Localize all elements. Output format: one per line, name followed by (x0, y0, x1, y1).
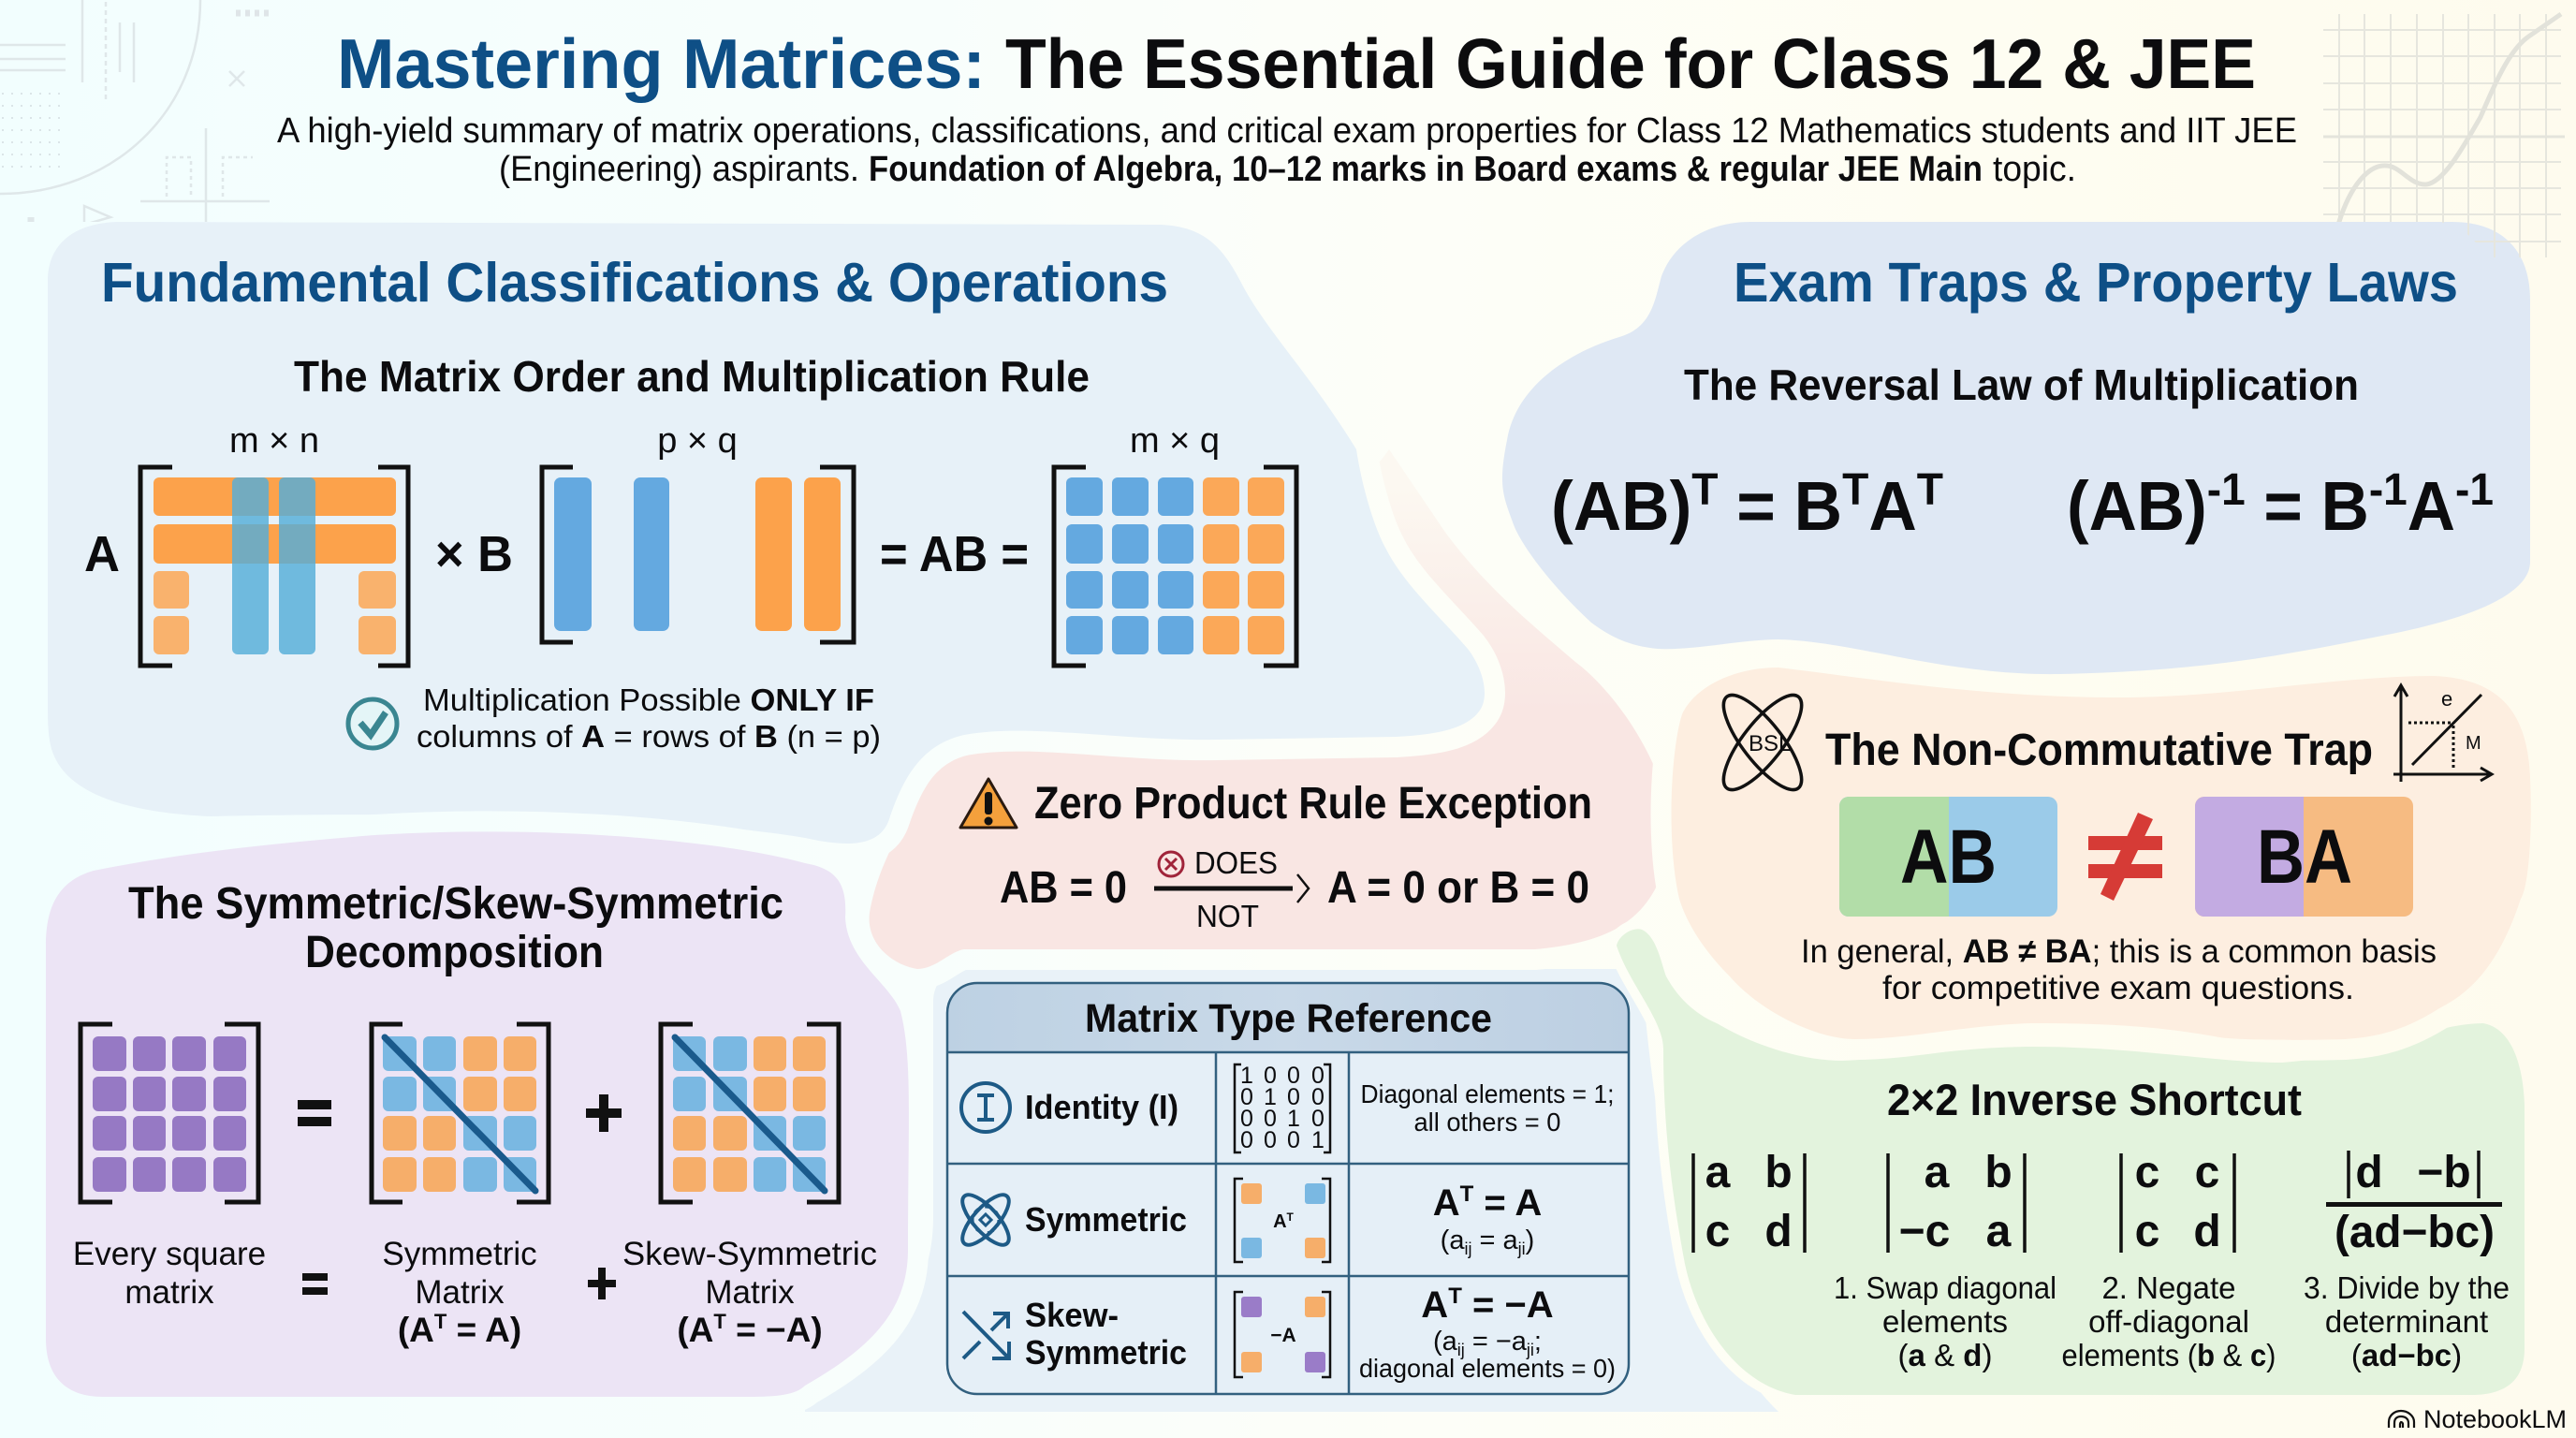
identity matrix: 0 (1311, 1084, 1325, 1110)
identity matrix: 0 (1311, 1063, 1325, 1089)
note: multiplication condition (417, 683, 881, 755)
formula: inverse reversal: -1 (2455, 465, 2494, 515)
title: Mastering Matrices: (337, 24, 986, 103)
panel: non-commutative backing (1672, 668, 2531, 1040)
heading: decomposition: Decomposition (305, 928, 604, 977)
identity matrix: 0 (1287, 1084, 1300, 1110)
subtitle: Foundation of Algebra, 10–12 marks in Board exams & regular JEE Main (869, 150, 1983, 189)
identity matrix (1235, 1063, 1330, 1153)
matrix A (140, 467, 408, 666)
icon: atom (1711, 684, 1814, 800)
order labels: m × n (229, 421, 319, 461)
row: symmetric: = a (1471, 1225, 1519, 1255)
icon: graph: M (2466, 733, 2481, 754)
arrow (1154, 874, 1309, 902)
heading: reversal law: The Reversal Law of Multiplication (1684, 360, 2359, 409)
icon: warning (960, 779, 1017, 828)
identity matrix: 0 (1287, 1127, 1300, 1153)
caption: step 2: 2. Negate (2101, 1270, 2236, 1305)
panel: 2x2 inverse backing (1617, 929, 2525, 1395)
caption: step 1: (a & d) (1898, 1338, 1992, 1372)
operator: plus (586, 1094, 622, 1132)
row: skew-symmetric: ij (1457, 1341, 1465, 1359)
heading: non-commutative trap: The Non-Commutative Trap (1825, 726, 2373, 775)
determinant: negate: c (2195, 1148, 2219, 1197)
matrix: skew-symmetric (661, 1024, 839, 1202)
panel: decomposition (46, 831, 909, 1397)
formula: inverse reversal: = B (2246, 467, 2369, 545)
equation: zero product (1000, 845, 1589, 933)
determinant: swap: −c (1899, 1207, 1950, 1256)
label: symmetric matrix (382, 1236, 537, 1349)
panel: exam traps backing (1502, 222, 2530, 674)
formula: transpose reversal: T (1691, 465, 1719, 515)
determinant: negate: c (2135, 1207, 2159, 1256)
equation: zero product: DOES (1194, 845, 1278, 880)
row: skew-symmetric: Symmetric (1025, 1333, 1187, 1372)
caption: step 3: determinant (2325, 1304, 2488, 1339)
caption: step 2 (2061, 1270, 2276, 1372)
symbol: not equal (2088, 813, 2162, 901)
identity matrix: 1 (1311, 1127, 1325, 1153)
caption: step 2: off-diagonal (2088, 1304, 2249, 1339)
row: skew-symmetric: Skew- (1025, 1296, 1119, 1334)
title: The Essential Guide for Class 12 & JEE (1005, 24, 2256, 103)
fraction: divide: d (2355, 1148, 2383, 1197)
identity matrix: 0 (1264, 1106, 1277, 1132)
fraction: divide: (ad−bc) (2334, 1208, 2495, 1257)
determinant: negate: d (2193, 1207, 2221, 1256)
label: skew-symmetric matrix: Skew-Symmetric (622, 1236, 877, 1272)
identity matrix: 0 (1240, 1127, 1253, 1153)
heading: zero product rule exception: Zero Product Rule Exception (1034, 779, 1592, 829)
row: skew-symmetric: ; (1534, 1327, 1542, 1357)
heading: decomposition: The Symmetric/Skew-Symmetric (128, 879, 783, 929)
subtitle: (Engineering) aspirants. (499, 150, 859, 189)
panel backing: matrix type reference (805, 969, 1778, 1412)
row: identity (961, 1063, 1614, 1153)
operator: equals (298, 1100, 331, 1126)
formula: transpose reversal: (AB) (1551, 467, 1697, 545)
row: skew-symmetric: = −A (1462, 1284, 1554, 1326)
formula: inverse reversal: A (2408, 467, 2455, 545)
heading: decomposition (128, 879, 783, 977)
icon: graph: e (2441, 687, 2452, 711)
row: symmetric: ij (1464, 1240, 1471, 1258)
identity matrix: 1 (1240, 1063, 1253, 1089)
label: skew-symmetric matrix: = −A) (726, 1311, 823, 1349)
determinant: swap: a (1986, 1207, 2012, 1256)
symmetric mini matrix (1235, 1179, 1330, 1262)
identity matrix: 0 (1264, 1063, 1277, 1089)
row: symmetric: A (1433, 1182, 1460, 1224)
identity matrix: 0 (1240, 1084, 1253, 1110)
box: BA (2195, 797, 2413, 917)
subtitle: topic. (1993, 150, 2076, 189)
row: symmetric: T (1460, 1181, 1474, 1207)
icon: graph (2393, 685, 2492, 782)
operators: = AB = (880, 526, 1029, 582)
caption: step 2: elements (b & c) (2061, 1338, 2276, 1372)
matrix: every square (80, 1024, 258, 1202)
row: symmetric: = A (1473, 1182, 1542, 1224)
operators: A (84, 526, 120, 582)
label: every square matrix: matrix (124, 1274, 214, 1311)
operators (84, 526, 1029, 582)
label: symmetric matrix: Symmetric (382, 1236, 537, 1272)
determinant: original: a (1705, 1148, 1731, 1197)
subtitle: A high-yield summary of matrix operations, classifications, and critical exam properties for Class 12 Mathematics students and IIT JEE (277, 111, 2297, 151)
operator: plus label (588, 1268, 616, 1299)
row: symmetric: ) (1526, 1225, 1534, 1255)
panel: zero product rule (870, 449, 1669, 969)
heading: exam traps: Exam Traps & Property Laws (1734, 252, 2458, 314)
caption: step 1 (1834, 1270, 2056, 1372)
equation: zero product: A = 0 or B = 0 (1327, 863, 1589, 913)
row: skew-symmetric: = −a (1465, 1327, 1528, 1357)
formula: transpose reversal: A (1868, 467, 1917, 545)
diagram: matrix multiplication (84, 421, 1296, 666)
box: AB: AB (1900, 814, 1997, 900)
label: skew-symmetric matrix: Matrix (705, 1274, 795, 1311)
subtitle (277, 111, 2297, 189)
formula: inverse reversal: -1 (2369, 465, 2408, 515)
operator: equals label (302, 1273, 328, 1295)
label: symmetric matrix: Matrix (415, 1274, 505, 1311)
label: symmetric matrix: (A (398, 1311, 434, 1349)
row: skew-symmetric: (a (1433, 1327, 1457, 1357)
row: skew-symmetric: T (1448, 1284, 1462, 1309)
title (337, 24, 2256, 103)
note: non-commutative: for competitive exam questions. (1882, 969, 2354, 1006)
determinant: negate: c (2135, 1148, 2159, 1197)
row: identity: all others = 0 (1413, 1108, 1561, 1137)
determinant: negate (2121, 1148, 2234, 1256)
row: skew-symmetric: diagonal elements = 0) (1359, 1354, 1616, 1383)
formula: transpose reversal: T (1842, 465, 1868, 515)
matrix B (542, 467, 854, 642)
label: symmetric matrix: = A) (446, 1311, 521, 1349)
matrix: symmetric (372, 1024, 549, 1202)
heading: fundamental classifications: Fundamental Classifications & Operations (101, 252, 1168, 314)
icon: atom: BSL (1749, 731, 1791, 756)
symmetric mini matrix: A (1273, 1211, 1287, 1232)
determinant: swap: a (1925, 1148, 1950, 1197)
icon: check (348, 699, 397, 748)
note: multiplication condition: Multiplication Possible ONLY IF (423, 683, 874, 718)
note: multiplication condition: columns of A = rows of B (n = p) (417, 720, 881, 755)
row: symmetric: ji (1517, 1240, 1526, 1258)
caption: step 1: elements (1882, 1304, 2008, 1339)
heading: 2x2 inverse: 2×2 Inverse Shortcut (1887, 1075, 2302, 1124)
identity matrix: 1 (1264, 1084, 1277, 1110)
caption: step 3: (ad−bc) (2351, 1338, 2462, 1372)
panel: fundamental classifications (48, 222, 1485, 844)
icon: symmetric atom (956, 1188, 1016, 1252)
order labels: p × q (657, 421, 738, 461)
identity matrix: 0 (1240, 1106, 1253, 1132)
determinant: swap: b (1984, 1148, 2012, 1197)
matrix AB (1054, 467, 1296, 666)
row: symmetric: (a (1441, 1225, 1464, 1255)
row: skew-symmetric: A (1421, 1284, 1448, 1326)
skew mini matrix: −A (1270, 1325, 1296, 1346)
icon: cross (1159, 852, 1183, 876)
formula: transpose reversal: = B (1719, 467, 1842, 545)
logo: NotebookLM: NotebookLM (2423, 1405, 2567, 1433)
fraction: divide: −b (2417, 1148, 2471, 1197)
identity matrix: 0 (1287, 1063, 1300, 1089)
formula: transpose reversal: T (1917, 465, 1943, 515)
row: identity: Diagonal elements = 1; (1361, 1079, 1614, 1108)
identity matrix: 0 (1264, 1127, 1277, 1153)
note: non-commutative (1801, 932, 2437, 1006)
determinant: original (1693, 1148, 1805, 1256)
determinant: original: b (1764, 1148, 1793, 1197)
heading: matrix order rule: The Matrix Order and Multiplication Rule (294, 352, 1090, 401)
fraction: divide (2326, 1148, 2502, 1257)
order labels (229, 421, 1220, 461)
row: skew-symmetric: ji (1526, 1341, 1534, 1359)
table heading: Matrix Type Reference (1085, 996, 1492, 1041)
operators: × B (435, 526, 513, 582)
determinant: original: c (1705, 1207, 1730, 1256)
note: non-commutative: In general, AB ≠ BA; this is a common basis (1801, 932, 2437, 970)
box: BA: BA (2257, 814, 2352, 900)
row: symmetric: Symmetric (1025, 1200, 1187, 1239)
identity matrix: 0 (1311, 1106, 1325, 1132)
label: skew-symmetric matrix: T (713, 1310, 726, 1333)
determinant: swap (1888, 1148, 2025, 1256)
row: symmetric (956, 1179, 1542, 1262)
label: skew-symmetric matrix (622, 1236, 877, 1349)
equation: zero product: NOT (1196, 899, 1259, 933)
icon: identity (961, 1083, 1010, 1132)
caption: step 3: 3. Divide by the (2304, 1270, 2510, 1305)
identity matrix: 1 (1287, 1106, 1300, 1132)
skew mini matrix (1235, 1292, 1330, 1377)
formula: inverse reversal: (AB) (2067, 467, 2213, 545)
row: skew-symmetric (963, 1284, 1616, 1383)
box: AB (1839, 797, 2057, 917)
caption: step 3 (2304, 1270, 2510, 1372)
icon: skew arrows (963, 1312, 1009, 1358)
label: every square matrix (73, 1236, 266, 1311)
table: matrix type reference (947, 983, 1629, 1394)
symmetric mini matrix: T (1287, 1211, 1295, 1224)
equation: zero product: AB = 0 (1000, 863, 1127, 913)
caption: step 1: 1. Swap diagonal (1834, 1270, 2056, 1305)
order labels: m × q (1130, 421, 1220, 461)
determinant: original: d (1764, 1207, 1793, 1256)
row: identity: Identity (I) (1025, 1088, 1178, 1126)
formula: inverse reversal: -1 (2207, 465, 2246, 515)
label: every square matrix: Every square (73, 1236, 266, 1272)
label: symmetric matrix: T (434, 1310, 447, 1333)
label: skew-symmetric matrix: (A (677, 1311, 713, 1349)
